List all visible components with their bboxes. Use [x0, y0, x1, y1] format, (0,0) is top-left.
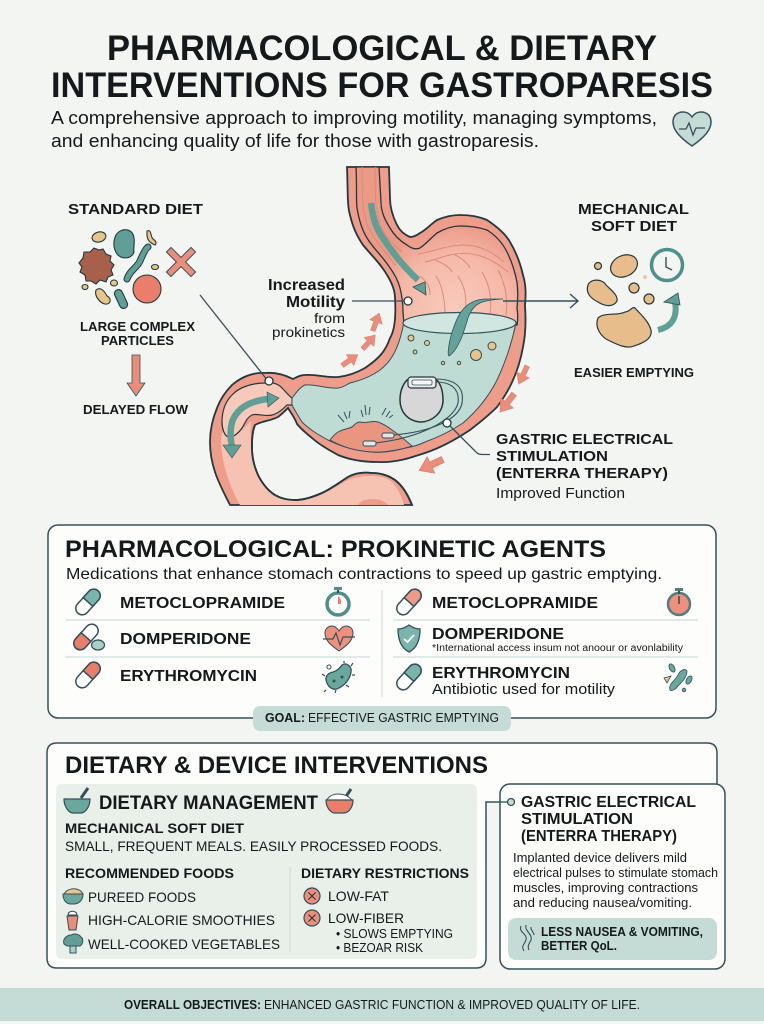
icon: cross low-fiber — [304, 910, 320, 926]
label: increased motility — [268, 277, 345, 340]
icon: stopwatch teal — [327, 587, 349, 615]
icon: capsule and tablet — [71, 622, 104, 652]
bezoar mass — [330, 421, 412, 452]
teal arrow in esophagus — [371, 203, 418, 280]
label: large complex particles: PARTICLES — [101, 334, 174, 348]
icon: fragmented bacteria — [664, 663, 693, 692]
list: recommended foods: RECOMMENDED FOODS — [65, 865, 234, 881]
label: increased motility: prokinetics — [272, 325, 345, 340]
panel: pharmacological prokinetic agents — [48, 525, 716, 718]
list: dietary restrictions — [301, 865, 469, 955]
panel: gastric electrical stimulation card — [500, 784, 725, 969]
title: PHARMACOLOGICAL & DIETARY — [107, 29, 657, 68]
heading: mechanical soft diet — [578, 202, 689, 235]
icon: teal bowl — [64, 788, 90, 813]
duodenum double arrow — [223, 392, 279, 458]
salmon motion arrows — [338, 311, 534, 479]
stomach folds — [362, 167, 508, 315]
card heading — [521, 794, 696, 845]
heading: mechanical soft diet: MECHANICAL — [578, 202, 689, 218]
callout text — [541, 925, 703, 953]
callout text: LESS NAUSEA & VOMITING, — [541, 925, 703, 939]
stomach diagram — [210, 167, 534, 505]
icon: clock — [652, 250, 682, 280]
list: dietary restrictions: DIETARY RESTRICTIONS — [301, 865, 469, 881]
label: gastric electrical stimulation: GASTRIC ELECTRICAL — [496, 431, 673, 448]
icon: heart with pulse — [673, 112, 711, 146]
footer bar: overall objectives: OVERALL OBJECTIVES: — [124, 998, 261, 1012]
subtitle: and enhancing quality of life for those with gastroparesis. — [51, 130, 539, 151]
card body text — [513, 850, 718, 910]
footer bar: overall objectives — [0, 988, 764, 1021]
list: dietary restrictions: • SLOWS EMPTYING — [336, 927, 453, 941]
label: increased motility: Increased — [268, 277, 345, 294]
heading: dietary management: DIETARY MANAGEMENT — [99, 793, 318, 814]
label: increased motility: from — [314, 311, 345, 326]
goal pill: GOAL: — [265, 711, 305, 725]
label: delayed flow: DELAYED FLOW — [83, 403, 188, 417]
icon: soft food particles — [587, 251, 654, 347]
teal flow curve — [448, 299, 503, 356]
text: mechanical soft diet: SMALL, FREQUENT MEALS. EASILY PROCESSED FOODS. — [65, 838, 442, 854]
card heading: GASTRIC ELECTRICAL — [521, 794, 696, 811]
row: right column drugs — [432, 595, 683, 698]
goal pill — [253, 706, 511, 731]
label: large complex particles — [80, 320, 196, 348]
arrow: to mechanical soft diet — [503, 294, 578, 308]
panel heading: PHARMACOLOGICAL: PROKINETIC AGENTS — [65, 536, 606, 563]
list: dietary restrictions: • BEZOAR RISK — [336, 941, 424, 955]
label: easier emptying: EASIER EMPTYING — [574, 366, 694, 380]
icon: red bowl — [326, 789, 353, 813]
callout line: motility — [352, 297, 412, 305]
card heading: (ENTERRA THERAPY) — [521, 828, 677, 845]
list: recommended foods: HIGH-CALORIE SMOOTHIES — [88, 912, 275, 928]
title — [51, 29, 713, 105]
label: gastric electrical stimulation: STIMULATION — [496, 448, 608, 465]
icon: capsule red — [73, 660, 103, 690]
fluid in stomach — [292, 322, 516, 452]
panel: dietary and device interventions — [47, 743, 717, 968]
icon: red x — [171, 252, 191, 272]
callout line: stimulator — [443, 419, 490, 454]
row: left column drugs — [120, 595, 285, 685]
icon: capsule teal right — [394, 662, 424, 692]
icon: large food particles — [79, 230, 161, 310]
row: right column drugs: METOCLOPRAMIDE — [432, 595, 598, 612]
icon: cross low-fat — [304, 888, 320, 904]
icon: capsule teal — [73, 587, 103, 617]
text: mechanical soft diet: MECHANICAL SOFT DIET — [65, 820, 244, 836]
icon: stopwatch red — [668, 588, 690, 615]
stomach outer wall — [210, 167, 526, 505]
label: gastric electrical stimulation: (ENTERRA THERAPY) — [496, 465, 668, 482]
label: large complex particles: LARGE COMPLEX — [80, 320, 196, 334]
card body text: electrical pulses to stimulate stomach — [513, 865, 718, 880]
fluid bubbles — [408, 335, 496, 365]
card body text: and reducing nausea/vomiting. — [513, 895, 692, 910]
icon: capsule red right — [394, 587, 424, 617]
row: right column drugs: ERYTHROMYCIN — [432, 665, 570, 682]
heading: mechanical soft diet: SOFT DIET — [591, 219, 677, 235]
panel heading: DIETARY & DEVICE INTERVENTIONS — [65, 752, 488, 779]
icon: broccoli — [64, 934, 83, 953]
icon: smoothie — [67, 911, 78, 930]
text: mechanical soft diet — [65, 820, 442, 854]
label: gastric electrical stimulation: Improved Function — [496, 486, 625, 502]
list: recommended foods — [63, 865, 280, 953]
duodenum arch — [358, 499, 388, 505]
heading: standard diet: STANDARD DIET — [68, 202, 203, 218]
connector node — [500, 798, 514, 806]
card heading: STIMULATION — [521, 811, 633, 828]
list: dietary restrictions: LOW-FIBER — [328, 910, 404, 926]
callout line: standard diet to pylorus — [200, 295, 273, 385]
panel intro text: Medications that enhance stomach contractions to speed up gastric emptying. — [66, 566, 662, 583]
duodenal lumen — [222, 383, 292, 437]
icon: curved teal arrow — [658, 293, 680, 330]
label: increased motility: Motility — [286, 294, 345, 311]
duodenum inner edge — [252, 425, 412, 505]
stomach contraction marks — [338, 405, 393, 422]
icon: heart pulse — [323, 626, 355, 651]
icon: shield check — [398, 625, 420, 652]
card body text: muscles, improving contractions — [513, 880, 698, 895]
fluid surface — [403, 312, 516, 334]
icon: puree bowl — [63, 889, 83, 904]
card body text: Implanted device delivers mild — [513, 850, 687, 865]
duodenum lighter tube — [221, 421, 404, 505]
list: recommended foods: WELL-COOKED VEGETABLES — [88, 936, 280, 952]
goal pill: EFFECTIVE GASTRIC EMPTYING — [308, 711, 499, 725]
icon: bacterium — [322, 661, 355, 693]
label: gastric electrical stimulation — [496, 431, 673, 502]
title: INTERVENTIONS FOR GASTROPARESIS — [51, 66, 713, 105]
row: right column drugs: DOMPERIDONE — [432, 626, 564, 643]
arrow: down to delayed flow — [127, 355, 145, 396]
upper stomach lumen and esophagus channel — [356, 167, 518, 325]
list: dietary restrictions: LOW-FAT — [328, 888, 389, 904]
callout: less nausea — [508, 918, 717, 960]
subtitle: A comprehensive approach to improving motility, managing symptoms, — [51, 107, 657, 128]
row: left column drugs: ERYTHROMYCIN — [120, 668, 257, 685]
panel: dietary management — [56, 784, 477, 959]
row: right column drugs: Antibiotic used for motility — [432, 682, 616, 698]
callout text: BETTER QoL. — [541, 939, 617, 953]
row: left column drugs: METOCLOPRAMIDE — [120, 595, 285, 612]
row: left column drugs: DOMPERIDONE — [120, 631, 251, 648]
row: right column drugs: *International access insum not anoour or avonlability — [432, 643, 683, 654]
subtitle — [51, 107, 657, 151]
list: recommended foods: PUREED FOODS — [88, 889, 196, 905]
icon: nausea waves — [520, 925, 534, 951]
footer bar: overall objectives: ENHANCED GASTRIC FUNCTION & IMPROVED QUALITY OF LIFE. — [264, 998, 640, 1012]
gastric stimulator device — [363, 377, 462, 446]
